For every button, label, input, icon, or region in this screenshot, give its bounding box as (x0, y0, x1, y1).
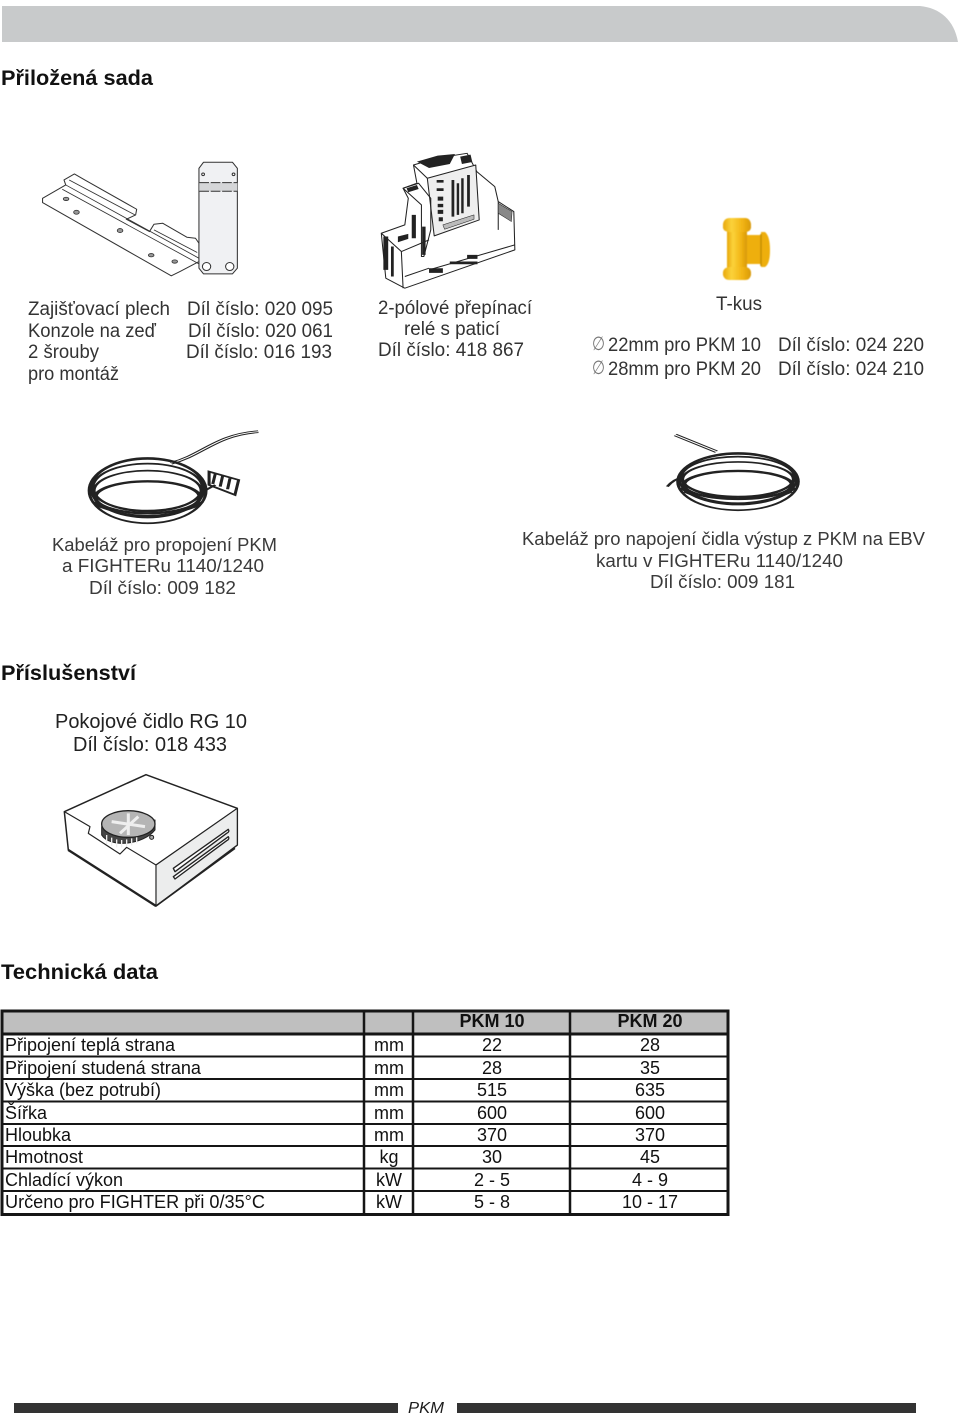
text: relay labels: 2-pólové přepínací (378, 298, 533, 319)
text: bracket labels (28, 299, 333, 385)
icon: relay with socket (381, 153, 515, 288)
row: Připojení studená strana: mm (374, 1058, 404, 1078)
text: T-piece labels: Díl číslo: 024 220 (778, 335, 924, 356)
row: Šířka: 600 (477, 1103, 507, 1123)
footer (14, 1400, 916, 1414)
row: Hloubka: 370 (635, 1125, 665, 1145)
text: relay labels: Díl číslo: 418 867 (378, 340, 524, 361)
table grid (2, 1011, 728, 1214)
text: bracket labels: Konzole na zeď (28, 321, 156, 342)
text: cable 2 labels (522, 529, 925, 592)
text: T-piece labels (592, 294, 924, 380)
text: cable 1 labels: Kabeláž pro propojení PKM (52, 535, 277, 555)
row: Připojení teplá strana (5, 1035, 660, 1055)
row: Připojení teplá strana: Připojení teplá strana (5, 1035, 176, 1055)
row: Šířka: Šířka (5, 1102, 48, 1123)
footer bar left (14, 1403, 398, 1413)
row: Hmotnost: Hmotnost (5, 1147, 83, 1167)
icon: room sensor RG 10 (64, 775, 237, 906)
footer bar right (457, 1403, 916, 1413)
row: Hloubka: Hloubka (5, 1125, 72, 1145)
icon: wall bracket (43, 162, 237, 276)
text: cable 2 labels: kartu v FIGHTERu 1140/1240 (596, 551, 843, 571)
text: cable 2 labels: Díl číslo: 009 181 (650, 572, 795, 592)
row: Výška: 635 (635, 1080, 665, 1100)
row: Určeno pro FIGHTER: 10 - 17 (622, 1192, 678, 1212)
text: bracket labels: Zajišťovací plech (28, 299, 170, 320)
text: bracket labels: Díl číslo: 020 061 (188, 321, 333, 342)
text: cable 1 labels: Díl číslo: 009 182 (89, 578, 236, 598)
text: T-piece labels: 22mm pro PKM 10 (608, 335, 761, 356)
heading: Technická data: Technická data (1, 960, 159, 984)
row: Připojení studená strana: Připojení studená strana (5, 1058, 202, 1078)
panel: accessories (55, 711, 247, 906)
row: Hmotnost (5, 1147, 660, 1167)
table header row: PKM 10 (459, 1011, 525, 1031)
row: Připojení teplá strana: 22 (482, 1035, 502, 1055)
row: Chladící výkon: 2 - 5 (474, 1170, 510, 1190)
row: Připojení studená strana: 35 (640, 1058, 660, 1078)
heading: Přiložená sada: Přiložená sada (1, 66, 154, 90)
row: Výška: mm (374, 1080, 404, 1100)
row: Šířka (5, 1102, 665, 1123)
text: bracket labels: pro montáž (28, 364, 119, 385)
text: cable 2 labels: Kabeláž pro napojení čidla výstup z PKM na EBV (522, 529, 925, 549)
table header row (459, 1011, 683, 1031)
row: Šířka: mm (374, 1103, 404, 1123)
icon: cable coil with connector (89, 432, 258, 523)
table: technical data (2, 1011, 728, 1214)
row: Chladící výkon: 4 - 9 (632, 1170, 668, 1190)
row: Určeno pro FIGHTER: Určeno pro FIGHTER při 0/35°C (5, 1192, 265, 1212)
row: Výška (5, 1080, 665, 1100)
text: bracket labels: Díl číslo: 016 193 (186, 342, 332, 363)
row: Připojení studená strana: 28 (482, 1058, 502, 1078)
row: Hmotnost: 30 (482, 1147, 502, 1167)
row: Hloubka: mm (374, 1125, 404, 1145)
text: T-piece labels: Díl číslo: 024 210 (778, 359, 924, 380)
icon: sensor cable coil (667, 435, 798, 510)
row: Hloubka: 370 (477, 1125, 507, 1145)
text: relay labels: relé s paticí (404, 319, 501, 340)
row: Chladící výkon: Chladící výkon (5, 1170, 123, 1190)
text: relay labels (378, 298, 533, 361)
row: Výška: Výška (bez potrubí) (5, 1080, 161, 1100)
header band (2, 6, 958, 42)
table header row: PKM 20 (617, 1011, 683, 1031)
row: Určeno pro FIGHTER: 5 - 8 (474, 1192, 510, 1212)
text: room sensor labels: Pokojové čidlo RG 10 (55, 711, 247, 733)
row: Určeno pro FIGHTER: kW (376, 1192, 402, 1212)
row: Připojení studená strana (5, 1058, 660, 1078)
row: Určeno pro FIGHTER (5, 1192, 678, 1212)
panel: enclosed kit (28, 153, 925, 598)
heading: Příslušenství: Příslušenství (1, 661, 137, 685)
text: room sensor labels (55, 711, 247, 756)
icon: yellow T-piece (723, 218, 770, 280)
row: Připojení teplá strana: 28 (640, 1035, 660, 1055)
text: T-piece labels: ∅ (592, 334, 605, 355)
row: Hloubka (5, 1125, 665, 1145)
row: Šířka: 600 (635, 1103, 665, 1123)
text: T-piece labels: ∅ (592, 358, 605, 379)
row: Chladící výkon: kW (376, 1170, 402, 1190)
row: Výška: 515 (477, 1080, 507, 1100)
text: T-piece labels: 28mm pro PKM 20 (608, 359, 761, 380)
text: T-piece labels: T-kus (716, 294, 762, 315)
text: cable 1 labels: a FIGHTERu 1140/1240 (62, 556, 264, 576)
text: bracket labels: Díl číslo: 020 095 (187, 299, 333, 320)
row: Hmotnost: 45 (640, 1147, 660, 1167)
text: bracket labels: 2 šrouby (28, 342, 99, 363)
row: Chladící výkon (5, 1170, 668, 1190)
row: Hmotnost: kg (379, 1147, 399, 1167)
table header fill (2, 1011, 728, 1033)
row: Připojení teplá strana: mm (374, 1035, 404, 1055)
text: cable 1 labels (52, 535, 277, 598)
text: room sensor labels: Díl číslo: 018 433 (73, 734, 227, 756)
